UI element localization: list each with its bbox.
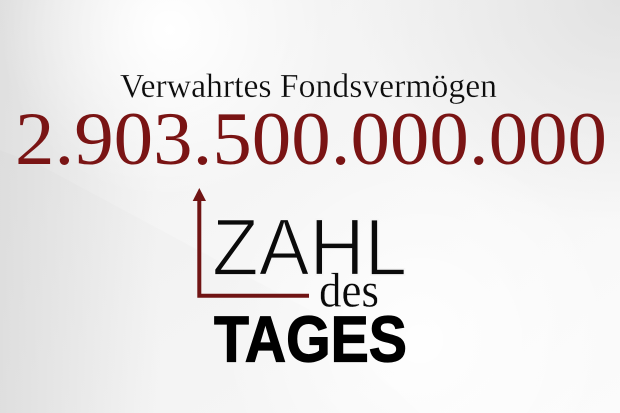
heading: Verwahrtes Fondsvermögen: Verwahrtes Fondsvermögen	[120, 68, 497, 105]
logo: ZAHL des TAGES	[212, 203, 407, 376]
icon: arrow axis	[193, 188, 309, 296]
logo word: TAGES: TAGES	[214, 302, 407, 376]
logo word: ZAHL: ZAHL	[212, 203, 407, 293]
logo word: des: des	[319, 262, 379, 318]
key number: 2.903.500.000.000	[15, 98, 607, 181]
